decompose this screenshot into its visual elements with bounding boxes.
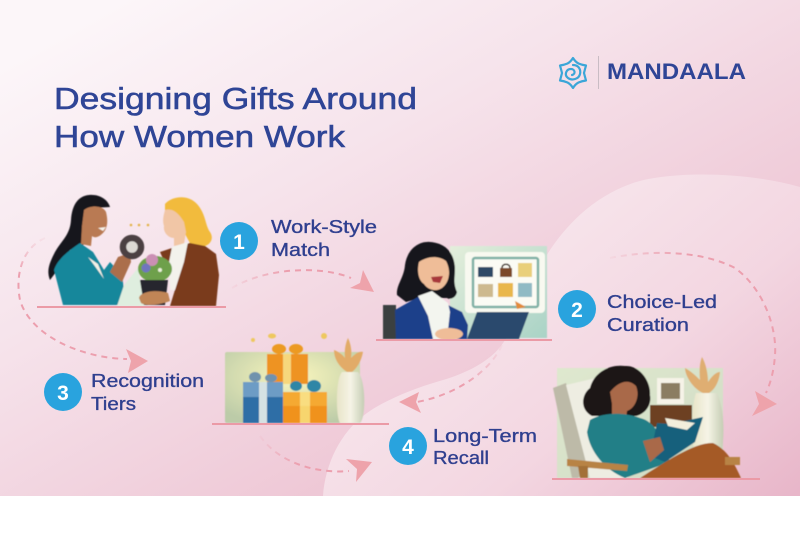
badge 1: 1	[233, 231, 245, 254]
background wave	[323, 174, 800, 496]
title	[54, 82, 417, 154]
picture	[657, 378, 684, 404]
label 3: Recognition	[91, 370, 204, 391]
woman face	[610, 382, 638, 420]
label 1: Match	[271, 239, 330, 260]
vase	[692, 393, 723, 462]
label 2: Choice-Led	[607, 291, 717, 312]
illustration: woman choosing gifts on a laptop	[383, 242, 547, 340]
book	[650, 417, 703, 462]
woman hair	[583, 366, 650, 416]
ribbon	[123, 238, 141, 256]
label 1: Work-Style	[271, 216, 377, 237]
blazer	[395, 297, 468, 339]
baseline 2	[376, 339, 552, 341]
face	[418, 257, 449, 290]
arrow: step 1 to step 2	[232, 270, 374, 292]
illustration: stacked gift boxes	[225, 333, 364, 423]
right woman face	[163, 210, 186, 246]
title: Designing Gifts Around	[54, 82, 417, 116]
logo	[560, 56, 746, 89]
badge 2: 2	[571, 299, 583, 322]
right woman jacket	[160, 243, 219, 306]
woman top	[587, 414, 670, 478]
label 4	[433, 425, 537, 468]
label 1	[271, 216, 377, 260]
badge 3: 3	[57, 382, 69, 405]
badge 4	[389, 427, 427, 465]
left woman hair	[48, 195, 110, 280]
badge 3	[44, 373, 82, 411]
arrow: recall back to gifts	[399, 345, 502, 413]
label 4: Recall	[433, 447, 489, 468]
badge 4: 4	[402, 436, 414, 459]
chair	[553, 383, 592, 478]
arrow: step 2 to step 4 image	[610, 253, 777, 416]
left woman face	[81, 206, 107, 246]
title: How Women Work	[54, 120, 346, 154]
logo: MANDAALA	[607, 59, 746, 84]
right woman hair	[165, 197, 212, 247]
label 4: Long-Term	[433, 425, 537, 446]
pants	[640, 443, 741, 478]
illustration: two women exchanging a gift	[48, 195, 219, 306]
label 2: Curation	[607, 314, 689, 335]
icon: mandala logo mark	[560, 58, 586, 88]
mint backdrop	[117, 268, 145, 306]
plant	[138, 256, 172, 282]
label 3: Tiers	[91, 393, 136, 414]
armrests	[567, 459, 628, 471]
baseline 4	[552, 478, 760, 480]
label 2	[607, 291, 717, 335]
label 3	[91, 370, 204, 414]
arrow: gifts to long-term recall	[260, 436, 372, 482]
arrow: step 3 loop	[18, 238, 148, 373]
table	[650, 405, 692, 427]
badge 1	[220, 222, 258, 260]
baseline 1	[37, 306, 226, 308]
left woman jacket	[54, 243, 124, 305]
illustration: woman reading in a chair	[553, 357, 741, 478]
baseline 3	[212, 423, 389, 425]
badge 2	[558, 290, 596, 328]
hair	[397, 242, 457, 302]
